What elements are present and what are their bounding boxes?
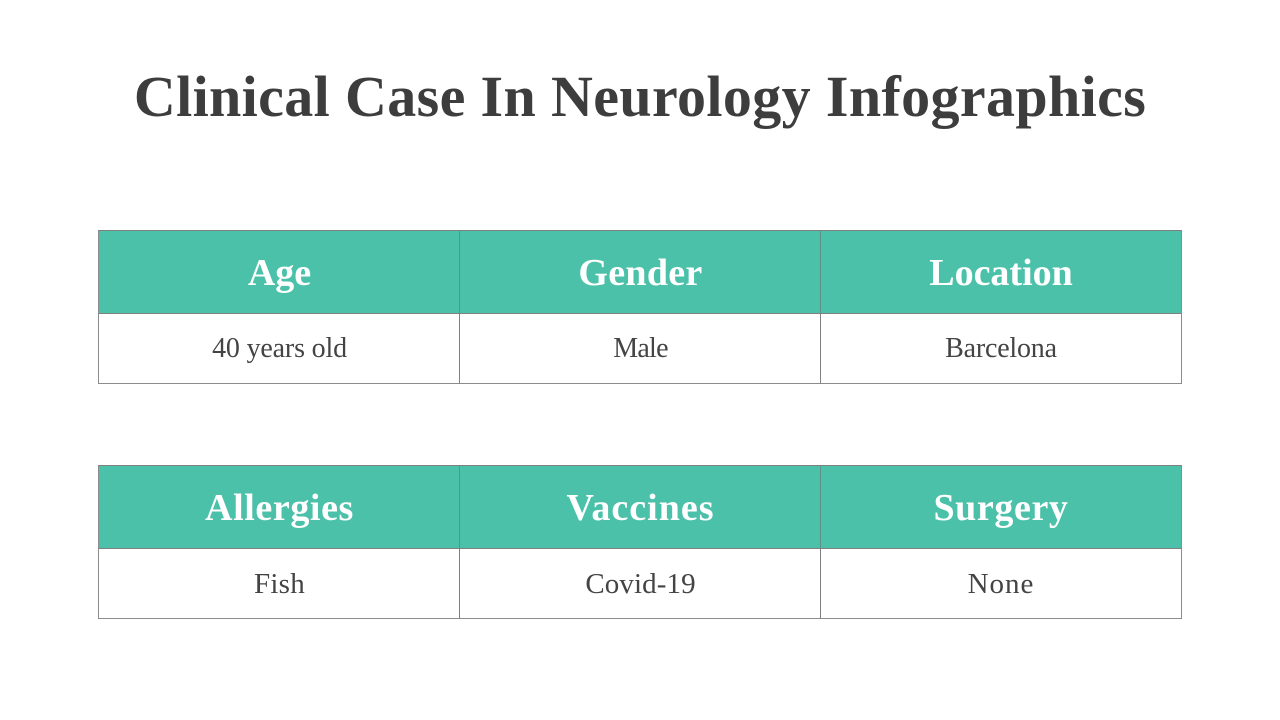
header: Allergies (98, 465, 460, 549)
value: vaccines: Covid-19 (585, 568, 696, 600)
header: Gender (459, 230, 821, 314)
header: Vaccines (459, 465, 821, 549)
value: gender (459, 313, 821, 384)
header: Allergies: Allergies (205, 487, 354, 529)
value: allergies (98, 548, 460, 619)
value: location (820, 313, 1182, 384)
title: Clinical Case In Neurology Infographics (134, 64, 1146, 129)
value: age: 40 years old (212, 333, 347, 364)
header: Surgery (820, 465, 1182, 549)
value: gender: Male (613, 333, 668, 364)
header: Surgery: Surgery (933, 487, 1069, 529)
value: vaccines (459, 548, 821, 619)
header: Location: Location (929, 252, 1073, 294)
value: surgery (820, 548, 1182, 619)
header: Age: Age (248, 252, 311, 294)
value: surgery: None (968, 568, 1034, 600)
value: allergies: Fish (254, 568, 305, 600)
header: Location (820, 230, 1182, 314)
table: medical history (98, 465, 1182, 619)
header: Vaccines: Vaccines (566, 487, 715, 529)
value: location: Barcelona (945, 333, 1057, 364)
table: patient demographics (98, 230, 1182, 384)
header: Gender: Gender (578, 252, 703, 294)
header: Age (98, 230, 460, 314)
value: age (98, 313, 460, 384)
